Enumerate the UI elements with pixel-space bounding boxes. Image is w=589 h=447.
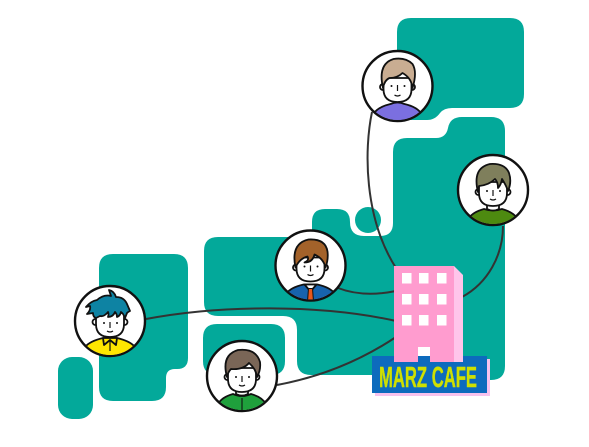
region: Okinawa <box>58 357 93 419</box>
building side <box>454 266 463 362</box>
avatar: north customer <box>362 51 432 126</box>
sign shadow <box>375 359 490 396</box>
sign board <box>372 356 487 393</box>
region: Hokkaido <box>397 18 524 120</box>
avatar: west customer <box>75 286 145 361</box>
region: Kyushu <box>99 254 188 401</box>
avatar: central customer <box>276 230 346 306</box>
cafe building and sign <box>372 266 490 396</box>
windows <box>402 273 446 326</box>
sign text: MARZ CAFE <box>379 362 477 394</box>
line: south customer to cafe <box>277 337 396 385</box>
line: east customer to cafe <box>462 226 503 297</box>
line: central customer to cafe <box>338 288 396 294</box>
region: Honshu <box>204 117 505 380</box>
region: Shikoku <box>203 324 285 375</box>
line: west customer to cafe <box>146 308 396 321</box>
avatar: south customer <box>207 341 277 416</box>
infographic: map of Japan with customers connected to a cafe <box>58 18 530 419</box>
region: small island <box>355 207 381 233</box>
avatar: east customer <box>458 155 528 230</box>
line: north customer to cafe <box>368 112 396 268</box>
map of Japan <box>58 18 524 419</box>
connecting lines <box>146 112 503 385</box>
door <box>418 347 430 356</box>
building front <box>394 266 454 362</box>
